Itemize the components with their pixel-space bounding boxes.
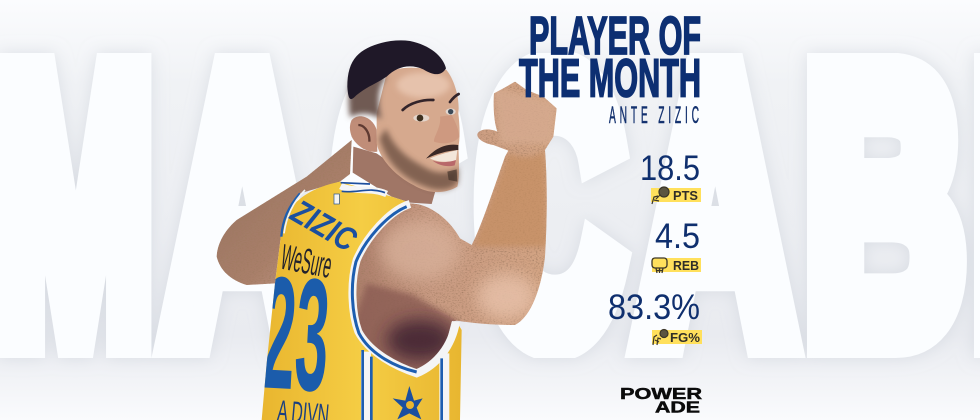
jersey number — [264, 276, 329, 420]
points label text: PTS — [673, 188, 698, 203]
armhole trim — [352, 204, 456, 373]
back collar trim — [281, 193, 300, 237]
tag — [334, 194, 339, 204]
player photo illustration — [217, 40, 563, 420]
player name: ANTE ZIZIC — [609, 101, 703, 128]
soul patch — [447, 169, 457, 182]
watermark word MACCABI — [0, 50, 980, 360]
hair — [347, 40, 446, 99]
neck — [353, 147, 437, 204]
jersey: WeSure — [278, 236, 335, 286]
icon: running player with ball — [652, 187, 669, 204]
icon: hoop — [652, 258, 667, 273]
sponsor logo — [620, 386, 702, 416]
beard stubble — [379, 128, 459, 190]
watermark word MACCABI: B — [805, 0, 964, 417]
rebounds value: 4.5 — [655, 217, 700, 256]
forearm tone — [473, 150, 547, 247]
title: PLAYER OF — [529, 6, 701, 66]
stat: points — [640, 149, 701, 204]
star badge — [393, 386, 423, 419]
head — [347, 40, 460, 192]
watermark word MACCABI: C — [477, 0, 622, 417]
torso and raised arm — [356, 82, 557, 369]
side stripes — [366, 352, 444, 420]
points label tag — [651, 188, 701, 202]
nose shadow — [434, 115, 459, 143]
field goal label tag — [652, 330, 702, 344]
watermark word MACCABI: C — [332, 0, 461, 417]
moustache — [426, 145, 458, 159]
title — [519, 6, 701, 108]
watermark word MACCABI: A — [637, 0, 793, 417]
title: THE MONTH — [519, 48, 701, 108]
field goal value: 83.3% — [608, 288, 700, 327]
watermark word MACCABI: M — [0, 0, 153, 417]
neck trim — [341, 186, 387, 194]
watermark word MACCABI: A — [164, 0, 320, 417]
rebounds label text: REB — [673, 258, 699, 273]
ear — [350, 116, 377, 152]
elbow highlight — [477, 273, 537, 320]
hair fade — [349, 67, 387, 119]
sponsor logo: POWER — [620, 386, 702, 403]
eyebrows — [403, 94, 459, 110]
rebounds label tag — [652, 258, 701, 272]
back arm — [217, 140, 352, 285]
armpit shadow — [358, 282, 459, 369]
jersey — [258, 182, 462, 420]
field goal label text: FG% — [670, 330, 700, 345]
icon: hand with ball — [653, 330, 668, 345]
sponsor logo: ADE — [655, 400, 700, 416]
mouth — [430, 150, 457, 162]
fist tone — [493, 87, 557, 143]
stat: rebounds — [652, 217, 701, 273]
face — [377, 68, 460, 192]
points value: 18.5 — [640, 149, 700, 188]
shoulder highlight — [380, 220, 460, 280]
eyes — [413, 114, 429, 122]
name on jersey: ZIZIC — [284, 193, 363, 260]
forehead light — [397, 72, 450, 98]
stat: field goal percentage — [608, 288, 702, 345]
